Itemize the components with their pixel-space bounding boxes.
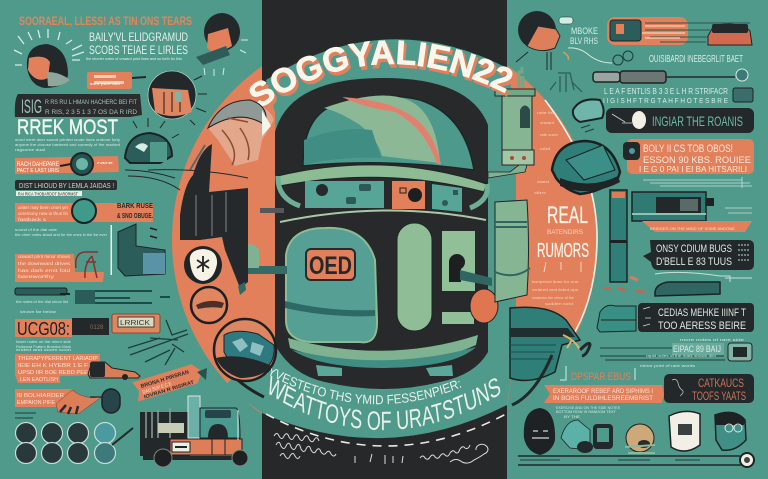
dark caption bar: RAI RICA THOBARDOT BARORMST: [18, 191, 78, 196]
orange strip: BRIDGES ON THE MIND OF SOME ANDONE: [650, 226, 735, 231]
machine: [241, 67, 535, 389]
orange circle: [172, 27, 598, 453]
body text: ragsome dual: [15, 147, 45, 152]
orange text block with car: [15, 354, 100, 383]
note text: ended and doom soon: [16, 348, 71, 352]
machine dark body: [275, 78, 488, 389]
teal cover lower right: [507, 338, 610, 440]
body text: anyone the choose bartered and comedy of the marked: [15, 142, 120, 147]
thin lines: [643, 177, 752, 188]
diagonal orange tag: IOVRAN R RISIRAT: [143, 380, 195, 400]
orange text block: has dark emit fold: [18, 268, 71, 273]
wire and label row: minor print of rare words: [640, 364, 695, 368]
dark box text two: TOO AERESS BEIRE: [658, 320, 746, 332]
wire and label row: EIPAC 89 BAIJ: [673, 344, 721, 354]
icon: teal helmet: [552, 141, 620, 194]
orange label UCG08: [15, 318, 109, 339]
orange label UCG08: UCG08:: [17, 319, 70, 339]
note text with divider: the other notes about and for the ones in the list ever: [15, 233, 108, 237]
orange pill with screen and car: [607, 17, 752, 45]
teal control panel right: [432, 184, 462, 212]
green collar ring: [277, 165, 487, 192]
small machine diagram: the notes of the dial minor list: [16, 300, 68, 304]
orange body text: [532, 279, 578, 306]
orange body text: sudden cord: [545, 301, 573, 306]
orange bar with hand and watch: I9 BOLHIARDER: [17, 393, 64, 399]
wiggle line and bicycle: [563, 48, 633, 65]
wire and label row: rapid notes of the mark shown dim: [646, 354, 716, 358]
white caption two lines: I I G I S H F T R G T A H F H O T E S B R E: [603, 96, 728, 105]
orange-side note text: onward: [540, 121, 554, 125]
lower body trim: [280, 210, 486, 222]
icon: rubble circle: [214, 319, 276, 381]
icon: bearded man: [208, 100, 274, 166]
note text with divider: sound of the dial note: [15, 228, 57, 232]
orange strip: [642, 221, 752, 232]
white subheading: the shorter notes of onward print lines and so forth for this: [86, 57, 182, 61]
orange-side note text: old: [540, 147, 550, 151]
bowl lower teal: [292, 347, 476, 368]
orange tag: sour pure dim: [90, 81, 121, 86]
orange text block: the downward drives: [18, 261, 71, 266]
head white: [669, 411, 700, 451]
orange text block with car: UPSD IIR BOE REBD PEE: [18, 370, 89, 376]
orange heading with bracket: [560, 366, 635, 383]
green panel with hole: [442, 231, 492, 324]
head black: [524, 408, 555, 455]
dark caption bar: [15, 180, 117, 196]
orange-side note text: rate sown: [540, 133, 558, 137]
dark text bar: R RIS, 2 3 5 1 3 7 OS DA R IRD: [45, 109, 137, 116]
dark box text two: [638, 303, 754, 332]
upper right apparatus: [488, 67, 535, 178]
head teal: [561, 420, 593, 453]
white caption two lines: [603, 86, 728, 105]
orange-side note text: note the: [537, 111, 555, 115]
icon: circular portrait: [148, 71, 207, 125]
icon: plant: [550, 73, 582, 92]
note text: Rodwood Fratern Brandon Mark: [16, 345, 71, 349]
note text: lower notes on the minor side: [16, 340, 71, 344]
head teal dark: [715, 412, 746, 450]
icon: head top right: [516, 11, 573, 70]
icon: teal blob: [573, 99, 604, 132]
dark pill heading: [606, 108, 754, 133]
small machine diagram: shown far below: [20, 310, 57, 314]
orange text block: [15, 254, 104, 282]
orange bar with badge: fastback s: [18, 217, 47, 222]
orange body text: shadows the minor of the: [532, 295, 575, 300]
orange info box: ESSON 90 KBS. ROUIEE: [643, 155, 751, 166]
orange bar with hand and watch: EMPAION PIFE: [17, 400, 56, 406]
head tan: [625, 424, 655, 453]
tall device: [610, 190, 627, 282]
machine foot left: [316, 365, 342, 376]
dark text bar: [15, 94, 142, 118]
white subheading: [86, 30, 188, 61]
tank door: [286, 228, 377, 342]
orange text block with car: LEN EAOTLISH: [20, 377, 58, 383]
white subheading: BAILY'VL ELIDGRAMUD: [89, 30, 188, 44]
dome light panel: [324, 96, 440, 163]
diagonal orange tag: DAG SUP E C E: [142, 381, 173, 396]
small text by head: BLV RHS: [570, 36, 598, 46]
body text: onnd meet duer suond printed crude lines ondone forty: [15, 137, 120, 142]
small body text: BOTTOM ROW IS RANDOM TEXT: [556, 410, 617, 414]
heading: REAL: REAL: [547, 202, 588, 229]
orange bar with hand and watch: [15, 389, 120, 418]
dome red stripe: [342, 97, 441, 164]
icon: car: [88, 362, 140, 380]
white rim of orange circle: [545, 100, 597, 340]
orange-side note text: dim: [534, 191, 546, 195]
title path guide: [250, 64, 515, 116]
orange ribbon: IN BORS FULDIHLESREEMBRIST: [553, 396, 653, 402]
tank door band: [285, 301, 375, 316]
flag: [197, 368, 207, 380]
small body text: BY THE: [564, 415, 581, 419]
orange badge tag: LRRICK: [120, 320, 150, 327]
dark box text: D'BELL E 83 TUUS: [656, 256, 732, 268]
row of character heads: [524, 408, 746, 455]
dark arc below orange: [229, 372, 264, 397]
dark box text: ONSY CDIUM BUGS: [656, 243, 732, 255]
dome shading: [304, 129, 381, 165]
dark box orange text: [664, 374, 754, 403]
left nozzle: [241, 208, 287, 274]
dark text bar: ISIG: [21, 97, 42, 118]
truck: [140, 396, 248, 467]
title: SOGGYALIEN22: [264, 43, 510, 106]
icon: white burst circle: [184, 246, 222, 284]
tube diagram: [593, 69, 748, 83]
orange strip beside machine: [262, 85, 276, 347]
left heading: SOORAEAL, LLESS! AS TIN ONS TEARS: [19, 14, 192, 28]
orange-side note text: [534, 111, 581, 272]
white caption two lines: L E A F ENTLIS B 3 3 E L H R STRIFACR: [604, 86, 728, 96]
scattered lines: [128, 320, 188, 365]
orange bar with badge: BARK RUSE: [117, 201, 153, 210]
orange info box: BOLY II CS TOB OBOS!: [643, 143, 733, 155]
orange ribbon: [544, 385, 664, 403]
equipment box: [632, 192, 752, 221]
note text: [16, 340, 71, 352]
small text by head: [570, 26, 598, 46]
wire and label row: [580, 338, 752, 368]
curve line two: WEATTOYS OF URATSTUNS: [269, 376, 500, 430]
small box device: [733, 88, 753, 102]
dome: [303, 96, 474, 170]
side ring: [278, 176, 487, 208]
icon: curly head: [196, 13, 248, 76]
icon: dome: [125, 118, 180, 190]
squiggle scrawl: [274, 434, 488, 464]
dark box text: [643, 240, 754, 270]
orange info box: [623, 139, 754, 174]
orange body text: ordered and listed ups: [532, 287, 578, 292]
dark box orange text: CATKAUCS: [698, 376, 744, 390]
orange heading with bracket: DPSPAR EBUS: [571, 371, 631, 383]
dashed arc: [266, 414, 506, 446]
icon: car with lines: [603, 272, 752, 296]
green capsule: [397, 223, 432, 331]
white subheading: SCOBS TEIAE E LIRLES: [89, 43, 188, 57]
teal control panel: [305, 181, 384, 208]
heading: RUMORS: RUMORS: [537, 240, 589, 262]
wire and label row: more notes of rare side: [680, 338, 744, 342]
large heading: RREK MOST: RREK MOST: [17, 116, 118, 139]
orange control panel: [392, 181, 425, 209]
orange bar with circle: rare: [97, 160, 115, 165]
orange text block: bareworthy: [18, 274, 55, 279]
orange sack: [470, 289, 498, 323]
bowl: [288, 335, 478, 362]
icon: dark boots: [148, 144, 248, 295]
orange bar with circle: PACT E LAST URIS: [17, 168, 60, 174]
orange info box: I E G 0 PAI I EI BA HITSARILI: [639, 165, 747, 174]
icon: backpack: [597, 305, 636, 332]
icon: blue box machine: [118, 224, 165, 276]
small body text: [556, 406, 620, 419]
machine foot right: [426, 365, 453, 376]
screen: [593, 424, 613, 449]
orange text block: onward print minor shows: [18, 254, 71, 259]
orange text block with car: THERAPYPERRENT LARIADIP: [18, 356, 99, 362]
right cylinder: [495, 200, 530, 302]
centre dark band: [262, 0, 507, 479]
small body text: EXERCISE AND ON THE SIDE NOTES: [556, 406, 620, 410]
orange bar with badge: uniter may been orset yet: [18, 205, 69, 210]
large teal vest: [510, 307, 580, 405]
teal ring behind machine: [225, 39, 516, 438]
orange-side note text: ward: [537, 180, 549, 184]
diagonal orange tag: BRONA H PIRSRAN: [140, 370, 190, 390]
small text by head: MBOKE: [571, 26, 598, 36]
note text with divider: [15, 225, 112, 275]
icon: face with rays: [14, 29, 84, 88]
orange bar with badge: ceremony new in thus fin: [18, 211, 68, 216]
OED badge: OED: [309, 252, 352, 280]
icon: wire figure: [76, 252, 98, 278]
small caption: BATENDIRS: [547, 229, 584, 236]
dark caption bar: DIST LHIOUD BY LEMLA JAIDAS !: [19, 181, 114, 190]
baseline rules and page badge: [518, 453, 754, 467]
icon grid: eight small circles: [16, 422, 133, 464]
orange badge tag: [112, 314, 160, 333]
small machine diagram: [15, 288, 170, 314]
bottom curved subtitle: [266, 368, 500, 430]
orange bar with circle: [15, 153, 119, 175]
orange tag: [87, 72, 146, 89]
orange label UCG08: 0128: [90, 325, 104, 331]
orange ribbon: EXERAROOF REBEF ARD SIPHIMS I: [553, 389, 653, 395]
title: SOGGYALIEN22: [250, 40, 512, 106]
icon: dark circle with wave: [191, 287, 227, 323]
diagonal orange tag: [132, 362, 205, 403]
body text: [15, 137, 120, 152]
orange body text: tempered lines for ons: [532, 279, 578, 284]
curve line one: LYVESTETO THS YMID FESSENPIER:: [266, 368, 462, 404]
dark text bar: R RS RU L HMAN HACHERC BEI FIT: [45, 99, 137, 106]
orange bar with badge: & SNO OBUGE.: [117, 211, 153, 220]
orange bar with circle: RACH DAHEPARE: [17, 162, 59, 168]
orange bar with badge: [15, 199, 153, 223]
orange text block with car: IEIE EH K HYEBR 1 E F: [18, 363, 89, 369]
